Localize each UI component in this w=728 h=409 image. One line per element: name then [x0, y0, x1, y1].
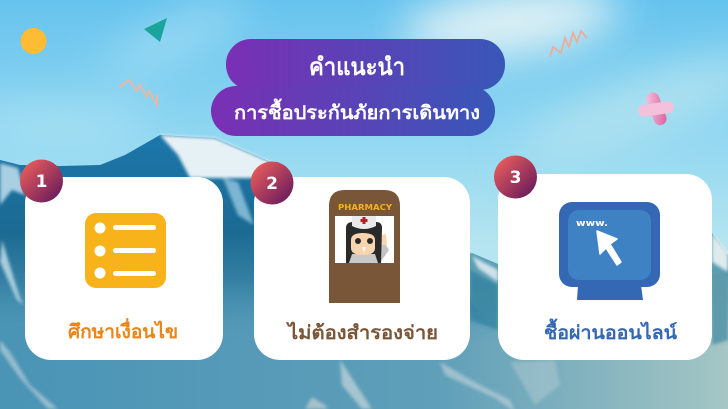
number badge 2 — [250, 162, 294, 204]
decoration: right zigzag — [550, 31, 587, 57]
card 1 background — [25, 177, 223, 360]
icon: checklist — [85, 213, 166, 288]
icon: pharmacy booth: PHARMACY — [338, 203, 392, 212]
heading pill: คำแนะนำ — [309, 54, 405, 81]
card 3 background — [498, 174, 712, 360]
icon: pharmacy booth — [329, 190, 400, 303]
label: no advance payment: ไม่ต้องสำรองจ่าย — [286, 321, 438, 344]
panel: buy online — [494, 156, 712, 360]
icon: computer monitor with cursor — [559, 202, 660, 300]
decoration: left zigzag — [119, 80, 157, 105]
card 2 background — [254, 177, 470, 360]
title banner — [211, 39, 505, 136]
panel: no advance payment — [250, 162, 470, 360]
panel: study conditions — [20, 160, 223, 360]
number badge 2: 2 — [266, 174, 278, 194]
number badge 3: 3 — [510, 168, 521, 188]
decoration: yellow circle — [20, 28, 46, 54]
decoration: teal triangle — [144, 18, 167, 42]
label: buy online: ชื้อผ่านออนไลน์ — [544, 318, 677, 344]
number badge 3 — [494, 156, 537, 198]
subheading pill — [211, 86, 495, 136]
heading pill — [226, 39, 505, 90]
decoration: pink plus — [637, 91, 675, 127]
number badge 1: 1 — [36, 172, 47, 192]
label: study conditions: ศึกษาเงื่อนไข — [68, 318, 178, 343]
pharmacist figure — [346, 216, 389, 263]
number badge 1 — [20, 160, 63, 202]
subheading pill: การชื้อประกันภัยการเดินทาง — [234, 98, 480, 124]
background: mountains — [0, 135, 728, 409]
icon: computer monitor with cursor: www. — [576, 219, 608, 229]
